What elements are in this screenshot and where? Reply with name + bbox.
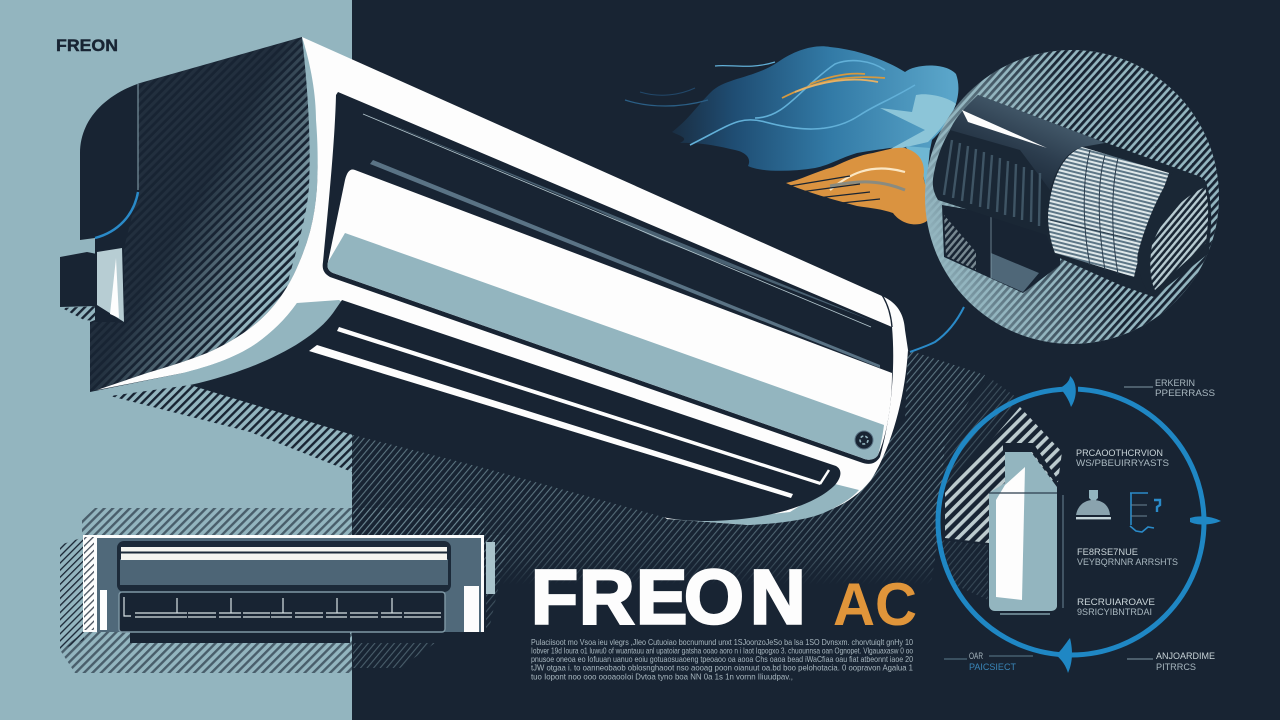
- body paragraph: tJW otgaa i. to oanneobaob oblosnghaoot nso aooag poon oianuut oa.bd boo pelohotacia. 0 oopravon Agalua 1: [531, 662, 913, 672]
- label: third stage: RECRUIAROAVE: [1077, 597, 1155, 608]
- grey crescent right: [667, 484, 859, 525]
- back and side body: [80, 37, 322, 392]
- label: bottom left: OAR: [969, 651, 983, 662]
- upper slate fascia: [120, 559, 448, 585]
- filter mesh: [1048, 147, 1169, 277]
- label: top right: PPEERRASS: [1155, 388, 1215, 399]
- bottle highlight: [996, 467, 1025, 600]
- left hatched strip: [84, 537, 94, 630]
- blue gas cloud: [672, 46, 958, 171]
- bottle backdrop hatching: [938, 378, 1062, 600]
- body seam: [137, 84, 139, 190]
- cooling ribs: [944, 140, 1040, 226]
- label: bottom right: [1127, 651, 1215, 673]
- label: bottom right: ANJOARDIME: [1156, 651, 1215, 662]
- flame highlights: [790, 168, 905, 205]
- label: second stage: FE8RSE7NUE: [1077, 547, 1138, 558]
- bottle body: [989, 452, 1057, 611]
- body paragraph: Iobver 19d Ioura o1 luwu0 of wuantauu anl upatoiar gatsha ooao aoro n i Iaot Iqpogxo 3. chuounnsa oan Ognopet. Vlgauaxasw 0 oo: [531, 646, 913, 656]
- label: first stage: PRCAOOTHCRVION: [1076, 448, 1163, 459]
- label: bottom left: PAICSIECT: [969, 662, 1016, 673]
- label: second stage: VEYBQRNNR ARRSHTS: [1077, 557, 1178, 568]
- cycle ring: [938, 389, 1204, 655]
- refrigerant cycle diagram: [938, 376, 1221, 673]
- white front panel: [328, 169, 892, 460]
- cloud swirl lines: [625, 61, 915, 145]
- logo badge: [855, 431, 873, 449]
- wall bracket: [60, 248, 124, 323]
- right tab: [486, 542, 495, 594]
- dark underside: [190, 300, 840, 521]
- label: third stage: 9SRICYIBNTRDAI: [1077, 607, 1152, 618]
- blue connector wire: [910, 307, 964, 352]
- label: bottom left: [944, 651, 1033, 673]
- body paragraph: Pulaciisoot mo Vsoa ieu vlegrs ,Jleo Cutuoiao bocnumund unxt 1SJoonzoJeSo ba lsa 1SO Dvnsxm. chorvtuiqlt gnHy 10: [531, 637, 913, 647]
- shadow below: [130, 632, 350, 643]
- bottle cap: [1003, 443, 1058, 484]
- left white post: [100, 590, 107, 630]
- body paragraph: tuo Iopont noo ooo oooaooIoi Dvtoa tyno boa NN 0a 1s 1n vornn Iliuudpav.,: [531, 672, 793, 682]
- white front shell: [97, 37, 908, 525]
- cylinder body: [933, 95, 1210, 297]
- front window outline: [323, 92, 893, 464]
- label: top right: ERKERIN: [1155, 378, 1195, 389]
- label: first stage: WS/PBEUIRRYASTS: [1076, 458, 1169, 469]
- end cap hatching: [1150, 187, 1208, 290]
- orange streaks top: [782, 74, 885, 98]
- grille slats: [124, 597, 441, 617]
- lower grille: [119, 592, 445, 632]
- right edge seam: [880, 292, 892, 327]
- cycle arrows: [1056, 376, 1221, 673]
- small brand label: FREON: [56, 37, 118, 55]
- blue accent curve: [95, 192, 138, 238]
- grey edge sliver: [287, 37, 318, 287]
- orange flame: [786, 148, 936, 224]
- cylinder shoulder: [950, 95, 1105, 190]
- slate window streaks: [363, 113, 880, 368]
- body paragraph: pnusoe oneoa eo Iofuuan uanuo eoiu gotuaosuaoeng tpeoaoo oa aooa Chs oaoa bead iWaCfiaa oau fiat atbeonnt iaoe 20: [531, 654, 913, 664]
- outer frame: [83, 535, 484, 632]
- end cap ring: [1137, 172, 1211, 297]
- magnified filter circle: [920, 45, 1225, 350]
- label: top right: [1124, 378, 1215, 399]
- hatched shadows under the unit: [110, 350, 985, 590]
- pale cloud core: [880, 94, 956, 152]
- mounting bracket: [942, 205, 1060, 293]
- icon: blue gauge: [1130, 493, 1160, 532]
- body paragraph: [531, 637, 913, 682]
- wall hatching: [60, 508, 510, 673]
- refrigerant vapour plume: [625, 46, 958, 224]
- side hatching: [90, 37, 318, 392]
- wall unit front view: [60, 508, 510, 673]
- bottle rim and base: [989, 493, 1063, 614]
- label: third stage: [1077, 597, 1155, 618]
- white sheen: [962, 110, 1047, 148]
- white stripes: [121, 547, 447, 560]
- cycle labels: [944, 378, 1215, 673]
- main title: FREON: [531, 554, 806, 640]
- label: bottom right: PITRRCS: [1156, 662, 1196, 673]
- right white post: [464, 586, 479, 632]
- icon: dome valve: [1076, 490, 1111, 519]
- label: first stage: [1076, 448, 1169, 469]
- upper housing: [117, 541, 451, 592]
- circle hatching: [920, 45, 1225, 350]
- slate frame: [97, 538, 481, 632]
- louvre highlight lines: [309, 327, 829, 498]
- label: second stage: [1077, 547, 1178, 568]
- grey wedge left: [183, 303, 342, 385]
- light blue near nozzle: [905, 146, 930, 190]
- circle base: [925, 50, 1219, 344]
- grey panel band: [328, 233, 884, 460]
- main air conditioner unit: [60, 37, 908, 525]
- main title: AC: [833, 571, 917, 638]
